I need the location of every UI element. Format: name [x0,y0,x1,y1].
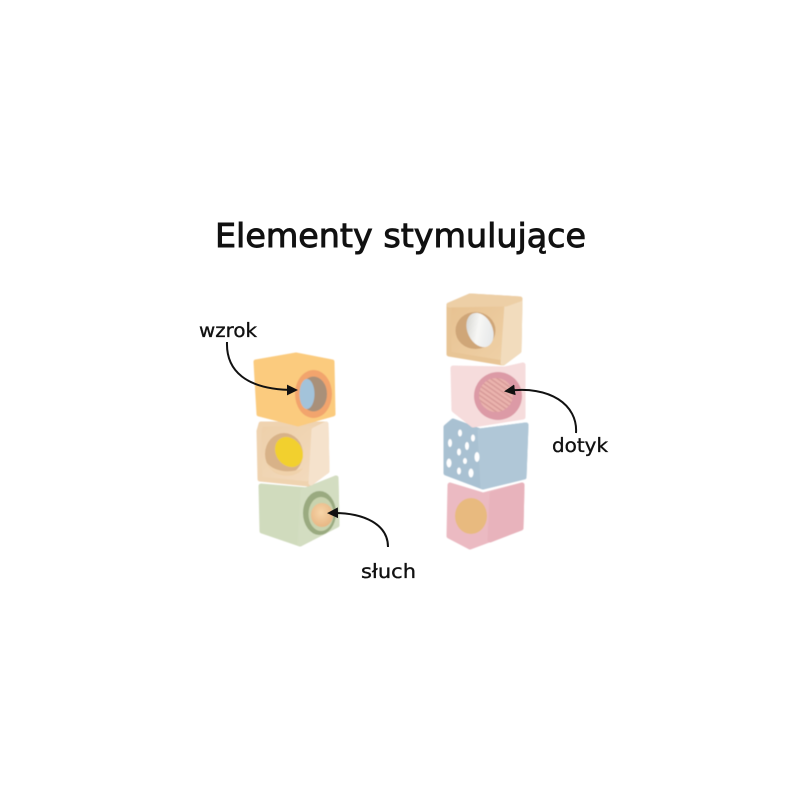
arrow: dotyk [507,390,576,433]
label: dotyk: dotyk [552,434,609,457]
arrow: wzrok [227,342,295,390]
block: green with peg [261,478,337,544]
title: Elementy stymulujące [215,216,586,255]
label: słuch: słuch [361,560,416,583]
block: light pink with ribbed disc [453,365,523,425]
left stack of blocks [256,355,337,544]
block: natural wood with yellow window [259,424,327,484]
right stack of blocks [446,296,526,547]
label: wzrok: wzrok [199,319,258,342]
arrow: słuch [330,513,388,547]
block: blue with white drops [446,421,526,487]
block: pink with wooden disc [449,485,522,547]
block: orange with mirror [256,355,333,424]
block: wood with mirror [449,296,520,363]
